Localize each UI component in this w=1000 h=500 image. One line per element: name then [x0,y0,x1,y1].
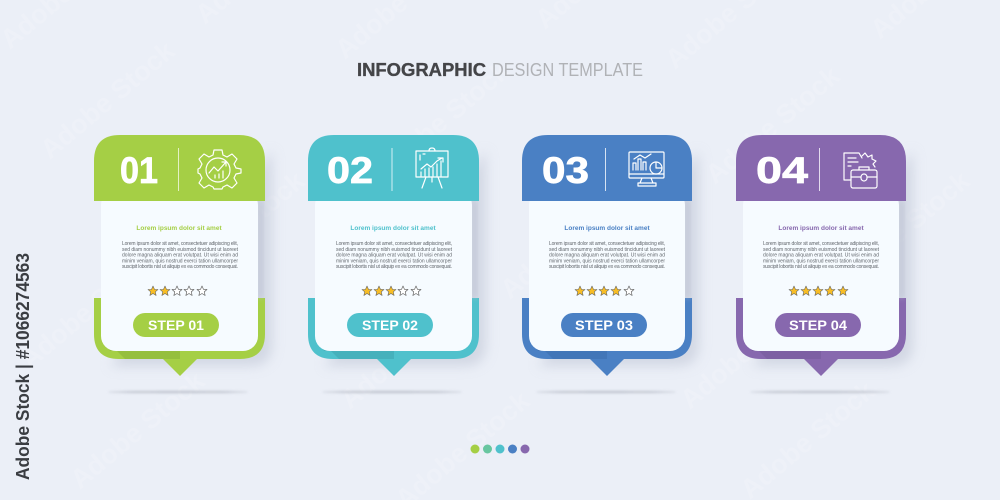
body text: sed diam nonummy nibh euismod tincidunt ut laoreet [336,247,453,253]
rating: 5 of 5 stars [789,286,848,296]
body text: minim veniam, quis nostrud exerci tation ullamcorper [763,258,879,264]
panel: step 04 [736,135,913,393]
watermark pattern: Adobe Stock [65,365,211,495]
title: INFOGRAPHIC [357,60,486,80]
step number: 01 [120,150,158,191]
body text [122,241,239,270]
body text: Lorem ipsum dolor sit amet, consectetuer adipiscing elit, [549,241,665,247]
rating: 3 of 5 stars [362,286,421,296]
body text: dolore magna aliquam erat volutpat. Ut wisi enim ad [336,253,452,259]
content card [315,190,472,351]
rating: 4 of 5 stars [575,286,634,296]
watermark pattern: Adobe Stock [15,245,161,375]
subheading: Lorem ipsum dolor sit amet [350,225,436,232]
stock id side text: Adobe Stock | #1066274563 [13,253,33,480]
panel: step 02 [308,135,486,393]
rating: 2 of 5 stars [148,286,207,296]
step pill [347,313,433,337]
body text [336,241,453,270]
body text: Lorem ipsum dolor sit amet, consectetuer adipiscing elit, [336,241,452,247]
content card [529,190,685,351]
icon: monitor with charts [629,152,664,186]
body text: Lorem ipsum dolor sit amet, consectetuer adipiscing elit, [122,241,238,247]
step pill: STEP 04 [789,318,848,333]
body text: dolore magna aliquam erat volutpat. Ut wisi enim ad [549,253,665,259]
title: DESIGN TEMPLATE [492,60,643,80]
content card [743,190,899,351]
colour dots [470,444,530,454]
body text: suscipit lobortis nisl ut aliquip ex ea commodo consequat. [763,264,879,270]
body text: sed diam nonummy nibh euismod tincidunt ut laoreet [763,247,880,253]
body text: sed diam nonummy nibh euismod tincidunt ut laoreet [549,247,666,253]
step pill [561,313,647,337]
watermark pattern: Adobe Stock [700,60,846,190]
watermark pattern: Adobe Stock [830,165,976,295]
header band [522,135,692,201]
header band [94,135,265,201]
subheading: Lorem ipsum dolor sit amet [136,225,222,232]
body text: suscipit lobortis nisl ut aliquip ex ea commodo consequat. [336,264,452,270]
body text: suscipit lobortis nisl ut aliquip ex ea commodo consequat. [122,264,238,270]
step pill [775,313,861,337]
subheading: Lorem ipsum dolor sit amet [778,225,864,232]
body text: dolore magna aliquam erat volutpat. Ut wisi enim ad [122,253,238,259]
body text: suscipit lobortis nisl ut aliquip ex ea commodo consequat. [549,264,665,270]
watermark pattern: Adobe Stock [495,175,641,305]
panel: step 01 [94,135,272,393]
body text: Lorem ipsum dolor sit amet, consectetuer adipiscing elit, [763,241,879,247]
step pill: STEP 02 [362,318,418,333]
title [357,60,643,80]
step number: 04 [756,150,809,191]
body text: dolore magna aliquam erat volutpat. Ut wisi enim ad [763,253,879,259]
watermark pattern: Adobe Stock [675,285,821,415]
step pill: STEP 01 [148,318,204,333]
icon: document, gear and briefcase [844,153,877,188]
body text [763,241,880,270]
icon: gear with growth chart [198,150,241,189]
icon: presentation board [416,148,448,188]
subheading: Lorem ipsum dolor sit amet [564,225,650,232]
panel: step 03 [522,135,699,393]
watermark pattern: Adobe Stock [165,165,311,295]
step number: 03 [542,150,589,191]
body text: sed diam nonummy nibh euismod tincidunt ut laoreet [122,247,239,253]
watermark pattern: Adobe Stock [35,35,181,165]
step pill: STEP 03 [575,318,634,333]
watermark pattern: Adobe Stock [370,55,516,185]
body text [549,241,666,270]
header band [736,135,906,201]
watermark pattern: Adobe Stock [335,285,481,415]
body text: minim veniam, quis nostrud exerci tation ullamcorper [336,258,452,264]
step number: 02 [327,150,373,191]
header band [308,135,479,201]
step pill [133,313,219,337]
body text: minim veniam, quis nostrud exerci tation ullamcorper [122,258,238,264]
content card [101,190,258,351]
body text: minim veniam, quis nostrud exerci tation ullamcorper [549,258,665,264]
